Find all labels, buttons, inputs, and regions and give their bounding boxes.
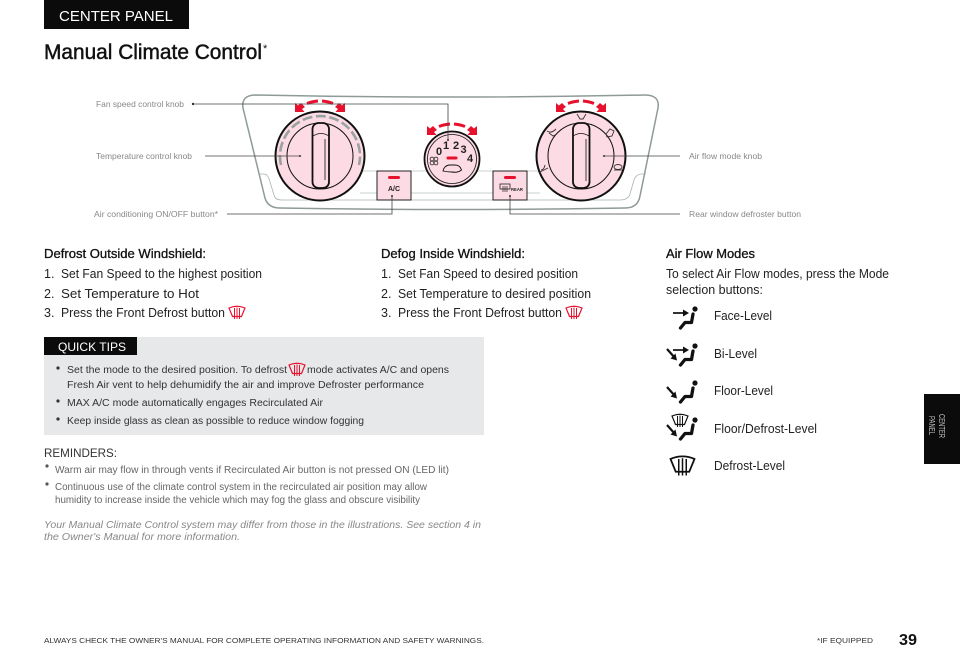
red rotation arrows	[295, 101, 606, 135]
text block: defrost outside windshield: 2.	[44, 287, 54, 301]
reminders: humidity to increase inside the vehicle which may fog the glass and obscure visibility	[55, 495, 420, 506]
side tab: center panel: PANEL	[927, 416, 937, 435]
air flow mode: floor-level: Floor-Level	[714, 384, 773, 398]
reminders: Continuous use of the climate control system in the recirculated air position may allow	[55, 482, 428, 493]
air flow mode: floor/defrost-level: Floor/Defrost-Level	[714, 422, 817, 436]
air flow mode: bi-level	[667, 343, 757, 365]
panel: quick tips	[44, 337, 484, 435]
callout: rear window defroster button	[509, 195, 801, 219]
text block: defrost outside windshield: 1.	[44, 267, 54, 281]
footer disclaimer: ALWAYS CHECK THE OWNER'S MANUAL FOR COMPLETE OPERATING INFORMATION AND SAFETY WARNINGS.	[44, 636, 484, 645]
side tab: center panel	[924, 394, 960, 464]
climate control panel diagram	[243, 95, 658, 210]
text block: defog inside windshield: 1.	[381, 267, 391, 281]
reminders	[44, 448, 449, 506]
panel trim lines	[259, 171, 646, 200]
callout: rear window defroster button: Rear window defroster button	[689, 209, 801, 219]
italic note: Your Manual Climate Control system may differ from those in the illustrations. See section 4 in	[44, 520, 481, 531]
rear defroster button: REAR	[511, 187, 523, 192]
air flow mode: floor/defrost-level	[667, 414, 817, 439]
callout: fan speed control knob	[96, 99, 449, 141]
center dial: fan speed: 3	[460, 144, 467, 156]
title: Manual Climate Control	[44, 41, 262, 64]
center dial: fan speed	[424, 132, 480, 186]
text block: defog inside windshield: Set Temperature to desired position	[398, 287, 591, 301]
air flow mode: defrost-level: Defrost-Level	[714, 459, 785, 473]
text block: defrost outside windshield: Press the Front Defrost button	[61, 306, 225, 320]
callout: air conditioning button	[94, 195, 393, 219]
rear defroster button	[493, 171, 527, 200]
text block: defog inside windshield: Set Fan Speed to desired position	[398, 267, 578, 281]
title: *	[263, 43, 268, 55]
italic note	[44, 520, 481, 543]
center dial: fan speed: 1	[443, 140, 449, 152]
text block: air flow modes intro: selection buttons:	[666, 283, 763, 297]
text block: defog inside windshield	[381, 247, 591, 320]
side tab: center panel: CENTER	[937, 414, 947, 438]
air flow mode: floor-level	[667, 380, 773, 402]
reminders: Warm air may flow in through vents if Recirculated Air button is not pressed ON (LED lit)	[55, 465, 449, 476]
quick tips label: QUICK TIPS	[58, 342, 126, 354]
A/C button: A/C	[388, 186, 400, 193]
right knob: air flow mode	[536, 112, 626, 200]
center dial: fan speed: 2	[453, 140, 459, 152]
reminders: REMINDERS:	[44, 448, 117, 460]
text block: defog inside windshield: 2.	[381, 287, 391, 301]
panel outline	[243, 95, 658, 210]
quick tips text	[56, 363, 449, 427]
callout: fan speed control knob: Fan speed control knob	[96, 99, 184, 109]
quick tips text: Fresh Air vent to help dehumidify the air and improve Defroster performance	[67, 380, 425, 391]
quick tips text: mode activates A/C and opens	[307, 365, 449, 376]
quick tips text: Keep inside glass as clean as possible to reduce window fogging	[67, 416, 364, 427]
air flow mode: face-level: Face-Level	[714, 309, 772, 323]
italic note: the Owner's Manual for more information.	[44, 532, 240, 543]
callout: air flow mode knob: Air flow mode knob	[689, 151, 762, 161]
center dial: fan speed: 4	[467, 153, 474, 165]
text block: air flow modes intro	[666, 247, 889, 297]
center dial: fan speed: 0	[436, 146, 442, 158]
section tab: center panel: CENTER PANEL	[59, 8, 173, 25]
air flow mode: face-level	[673, 306, 772, 328]
page number: 39	[899, 632, 917, 649]
footer: if equipped: *IF EQUIPPED	[817, 636, 874, 645]
text block: air flow modes intro: To select Air Flow modes, press the Mode	[666, 267, 889, 281]
callout: temperature control knob: Temperature control knob	[96, 151, 192, 161]
text block: defog inside windshield: 3.	[381, 306, 391, 320]
text block: defog inside windshield: Press the Front Defrost button	[398, 306, 562, 320]
text block: defrost outside windshield: Set Fan Speed to the highest position	[61, 267, 262, 281]
callout: air conditioning button: Air conditioning ON/OFF button*	[94, 209, 219, 219]
quick tips label	[44, 337, 137, 355]
text block: defrost outside windshield: 3.	[44, 306, 54, 320]
left knob: temperature	[276, 112, 364, 200]
mode markings	[540, 114, 622, 172]
air flow mode: bi-level: Bi-Level	[714, 347, 757, 361]
text block: defrost outside windshield: Defrost Outside Windshield:	[44, 247, 206, 261]
quick tips text: Set the mode to the desired position. To defrost	[67, 365, 287, 376]
text block: defog inside windshield: Defog Inside Windshield:	[381, 247, 525, 261]
text block: air flow modes intro: Air Flow Modes	[666, 247, 755, 261]
text block: defrost outside windshield: Set Temperature to Hot	[61, 287, 200, 301]
A/C button	[377, 171, 411, 200]
quick tips text: MAX A/C mode automatically engages Recirculated Air	[67, 398, 324, 409]
text block: defrost outside windshield	[44, 247, 262, 320]
air flow mode: defrost-level	[670, 456, 785, 476]
section tab: center panel	[44, 0, 189, 29]
